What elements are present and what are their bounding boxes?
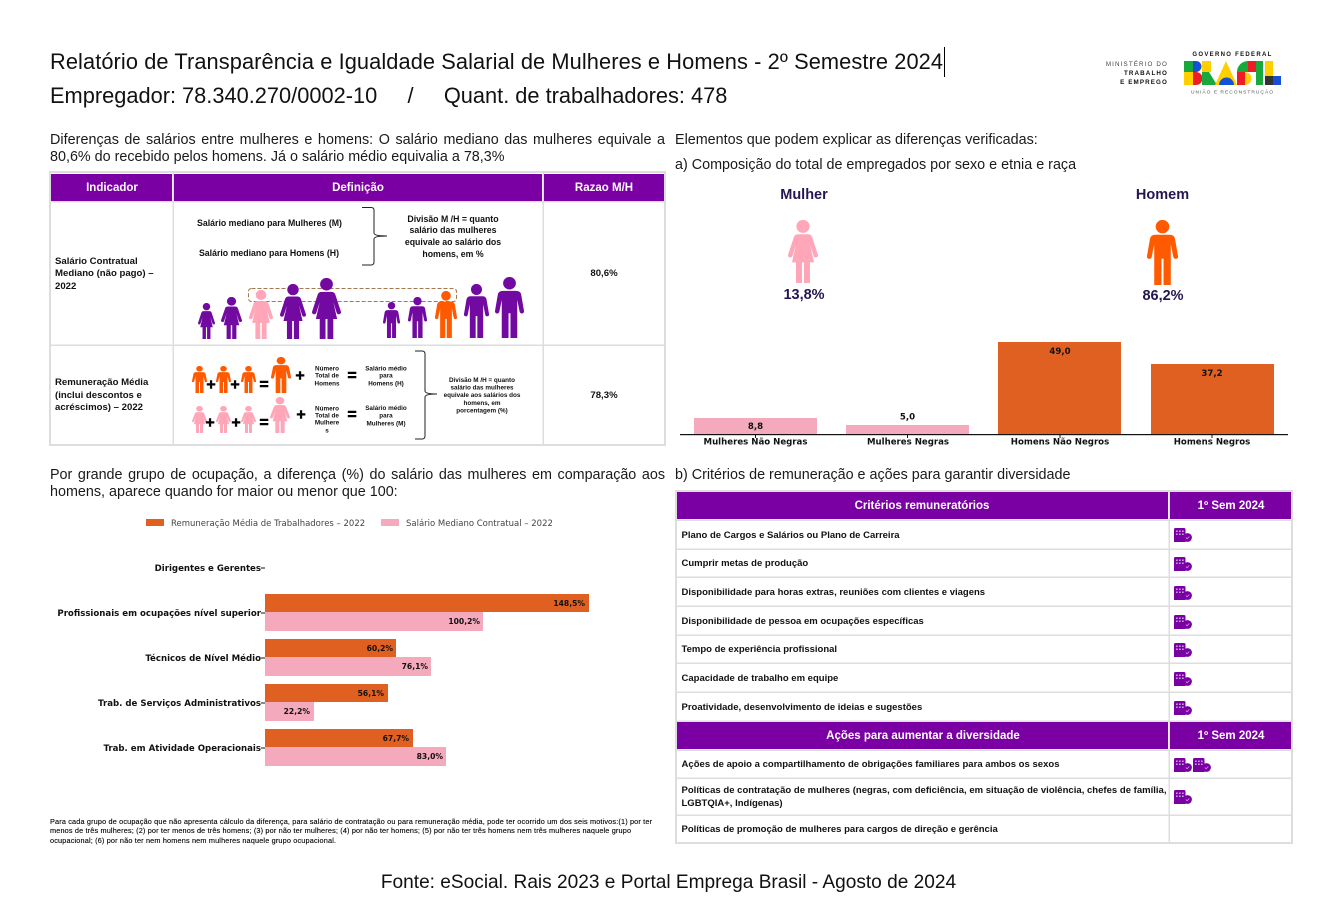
women average equation: + — [296, 406, 306, 424]
median ratio value: 80,6% — [590, 268, 618, 279]
header: remuneration criteria: 1º Sem 2024 — [1198, 500, 1265, 512]
men average equation: Homens — [314, 380, 340, 388]
row label: median salary — [55, 256, 154, 292]
bar chart: composition by sex and race: 37,2 — [1201, 369, 1223, 379]
median division explanation: equivale ao salário dos — [405, 237, 501, 247]
men average equation: Homens (H) — [368, 380, 404, 388]
table header — [51, 174, 664, 201]
legend: Remuneração Média de Trabalhadores – 2022 — [171, 518, 365, 529]
women average equation: Mulheres (M) — [366, 420, 406, 428]
row label: median salary: 2022 — [55, 281, 76, 292]
footnote: menos de três mulheres; (2) por ter menos de três homens; (3) por não ter mulheres; (4) por não ter homens; (5) por não ter três homens nem três mulheres naquele grupo — [50, 826, 631, 835]
bar chart: pay gap by occupation: 60,2% — [367, 644, 393, 653]
bracket — [415, 351, 437, 439]
criteria rows — [682, 530, 985, 713]
logo: ministry and federal government: MINISTÉRIO DO — [1106, 61, 1168, 68]
bar chart: composition by sex and race: 5,0 — [900, 412, 915, 422]
men average equation: + — [295, 368, 305, 384]
average division explanation — [444, 377, 521, 414]
bar chart: pay gap by occupation: 83,0% — [417, 752, 443, 761]
row label: median salary: Salário Contratual — [55, 256, 138, 267]
bar chart: composition by sex and race: Homens Não Negros — [1011, 438, 1109, 448]
women figures ordered by salary — [198, 278, 341, 339]
men average equation: Número — [315, 366, 339, 372]
man share — [1136, 187, 1189, 304]
woman share: 13,8% — [783, 287, 825, 303]
criteria rows: Plano de Cargos e Salários ou Plano de Carreira — [682, 530, 900, 541]
bar chart: composition by sex and race: 49,0 — [1049, 347, 1071, 357]
men figures ordered by salary — [383, 277, 524, 338]
criteria rows: Cumprir metas de produção — [682, 558, 808, 569]
diversity rows — [682, 759, 1166, 835]
row label: average pay: (inclui descontos e — [55, 390, 142, 401]
header: diversity actions: 1º Sem 2024 — [1198, 730, 1265, 742]
man share: 86,2% — [1142, 288, 1184, 304]
median division explanation: Divisão M /H = quanto — [407, 214, 499, 224]
women average equation: para — [379, 412, 393, 420]
men average equation: Salário médio — [365, 366, 407, 372]
median salary definition labels: Salário mediano para Mulheres (M) — [197, 218, 342, 228]
bar chart: pay gap by occupation: Trab. em Atividade Operacionais — [103, 744, 261, 754]
women average equation: Salário médio — [365, 405, 407, 412]
bar chart: pay gap by occupation — [57, 564, 589, 766]
title: Relatório de Transparência e Igualdade Salarial de Mulheres e Homens - 2º Semestre 2024 — [50, 49, 943, 74]
bar chart: composition by sex and race: Mulheres Negras — [867, 438, 949, 448]
source: Fonte: eSocial. Rais 2023 e Portal Emprega Brasil - Agosto de 2024 — [381, 872, 957, 893]
woman share: Mulher — [780, 187, 828, 203]
company icons for diversity actions — [1174, 758, 1211, 804]
intro paragraph: salary differences — [50, 132, 665, 165]
table header: Definição — [332, 182, 384, 194]
criteria rows: Tempo de experiência profissional — [682, 644, 837, 655]
men average equation: para — [379, 372, 393, 380]
bar chart: pay gap by occupation: Profissionais em ocupações nível superior — [57, 609, 262, 619]
table header: Razao M/H — [575, 182, 633, 194]
criteria rows: Disponibilidade de pessoa em ocupações específicas — [682, 616, 924, 627]
bar chart: pay gap by occupation: Dirigentes e Gerentes — [155, 564, 261, 574]
occupation paragraph: Por grande grupo de ocupação, a diferença (%) do salário das mulheres em comparação aos — [50, 467, 665, 483]
criteria rows: Disponibilidade para horas extras, reuniões com clientes e viagens — [682, 587, 985, 598]
subheading b: b) Critérios de remuneração e ações para garantir diversidade — [675, 467, 1070, 483]
intro paragraph: salary differences: 80,6% do recebido pelos homens. Já o salário médio equivalia a 78,3% — [50, 149, 505, 165]
women average equation: + — [231, 414, 241, 432]
median division explanation: homens, em % — [422, 249, 484, 259]
median salary definition labels: Salário mediano para Homens (H) — [199, 248, 339, 258]
median division explanation: salário das mulheres — [409, 225, 497, 235]
bar chart: pay gap by occupation: Trab. de Serviços Administrativos — [98, 699, 261, 709]
footnote: ocupacional; (6) por não ter nem homens nem mulheres naquele grupo ocupacional. — [50, 836, 336, 845]
logo: ministry and federal government: TRABALHO — [1124, 70, 1168, 77]
bar chart: composition by sex and race — [680, 342, 1288, 448]
footnote: Para cada grupo de ocupação que não apresenta cálculo da diferença, para salário de contratação ou para remuneração média, pode ter ocorrido um dos seis motivos:(1) por ter — [50, 817, 653, 826]
employer and worker count: Empregador: 78.340.270/0002-10 / Quant. de trabalhadores: 478 — [50, 83, 727, 108]
diversity rows: LGBTQIA+, Indígenas) — [682, 798, 783, 809]
bar chart: composition by sex and race: Mulheres Não Negras — [704, 438, 807, 448]
header: remuneration criteria — [677, 492, 1291, 519]
bar chart: composition by sex and race: Homens Negros — [1174, 438, 1250, 448]
average division explanation: Divisão M /H = quanto — [449, 377, 515, 384]
woman share — [780, 187, 828, 303]
men average equation: = — [347, 368, 357, 384]
average division explanation: equivale aos salários dos — [444, 392, 521, 399]
occupation paragraph: homens, aparece quando for maior ou menor que 100: — [50, 484, 398, 500]
dashed median highlight — [248, 288, 456, 302]
women average equation: = — [259, 414, 269, 432]
women average equation: Número — [315, 406, 339, 412]
men average equation — [192, 357, 407, 394]
women average equation: + — [205, 414, 215, 432]
footnote — [50, 817, 653, 845]
heading: elements explaining differences: Elementos que podem explicar as diferenças verificadas: — [675, 132, 1038, 148]
bar chart: pay gap by occupation: 67,7% — [383, 734, 409, 743]
bar chart: pay gap by occupation: 22,2% — [284, 707, 310, 716]
bar chart: composition by sex and race: 8,8 — [748, 422, 763, 432]
men average equation: + — [230, 376, 240, 394]
bar chart: pay gap by occupation: 148,5% — [553, 599, 585, 608]
legend: Salário Mediano Contratual – 2022 — [406, 519, 553, 529]
average ratio value: 78,3% — [590, 390, 618, 401]
median division explanation — [405, 214, 501, 259]
women average equation: Total de — [315, 412, 339, 420]
average division explanation: porcentagem (%) — [456, 408, 508, 414]
bracket — [362, 208, 387, 265]
average division explanation: salário das mulheres — [450, 384, 514, 392]
panel: indicator table — [50, 172, 665, 445]
men average equation: + — [206, 376, 216, 394]
women average equation: Mulhere — [315, 420, 340, 426]
subheading a: a) Composição do total de empregados por sexo e etnia e raça — [675, 157, 1076, 173]
diversity rows: Políticas de promoção de mulheres para cargos de direção e gerência — [682, 824, 998, 835]
men average equation: = — [259, 376, 269, 394]
logo: ministry and federal government — [1106, 52, 1281, 96]
occupation paragraph — [50, 467, 665, 500]
average division explanation: homens, em — [463, 400, 501, 407]
bar chart: pay gap by occupation: 100,2% — [448, 617, 480, 626]
row label: average pay: Remuneração Média — [55, 377, 149, 388]
intro paragraph: salary differences: Diferenças de salários entre mulheres e homens: O salário mediano das mulheres equivale a — [50, 132, 665, 148]
women average equation: = — [347, 406, 357, 424]
diversity rows: Políticas de contratação de mulheres (negras, com deficiência, em situação de violência, chefes de família, — [682, 785, 1166, 796]
man share: Homem — [1136, 187, 1189, 203]
header: remuneration criteria: Critérios remuneratórios — [855, 500, 989, 512]
row label: median salary: Mediano (não pago) – — [55, 268, 154, 279]
table header: Indicador — [86, 182, 138, 194]
company icons for criteria — [1174, 528, 1192, 715]
criteria rows: Capacidade de trabalho em equipe — [682, 673, 838, 684]
header: diversity actions — [677, 722, 1291, 749]
criteria rows: Proatividade, desenvolvimento de ideias e sugestões — [682, 702, 922, 713]
bar chart: pay gap by occupation: 56,1% — [358, 689, 384, 698]
legend — [146, 518, 553, 529]
bar chart: pay gap by occupation: Técnicos de Nível Médio — [145, 653, 261, 664]
women average equation — [192, 397, 407, 434]
row label: average pay: acréscimos) – 2022 — [55, 402, 143, 413]
diversity rows: Ações de apoio a compartilhamento de obrigações familiares para ambos os sexos — [682, 759, 1060, 770]
panel: criteria and diversity table — [676, 491, 1292, 843]
logo: ministry and federal government: UNIÃO E RECONSTRUÇÃO — [1191, 88, 1274, 96]
header: diversity actions: Ações para aumentar a diversidade — [826, 730, 1020, 742]
row label: average pay — [55, 377, 149, 413]
median salary definition labels — [197, 218, 342, 258]
men average equation: Total de — [315, 372, 339, 380]
logo: ministry and federal government: GOVERNO FEDERAL — [1192, 52, 1273, 58]
bar chart: pay gap by occupation: 76,1% — [402, 662, 428, 671]
women average equation: s — [325, 428, 329, 434]
logo: ministry and federal government: E EMPREGO — [1120, 79, 1168, 86]
